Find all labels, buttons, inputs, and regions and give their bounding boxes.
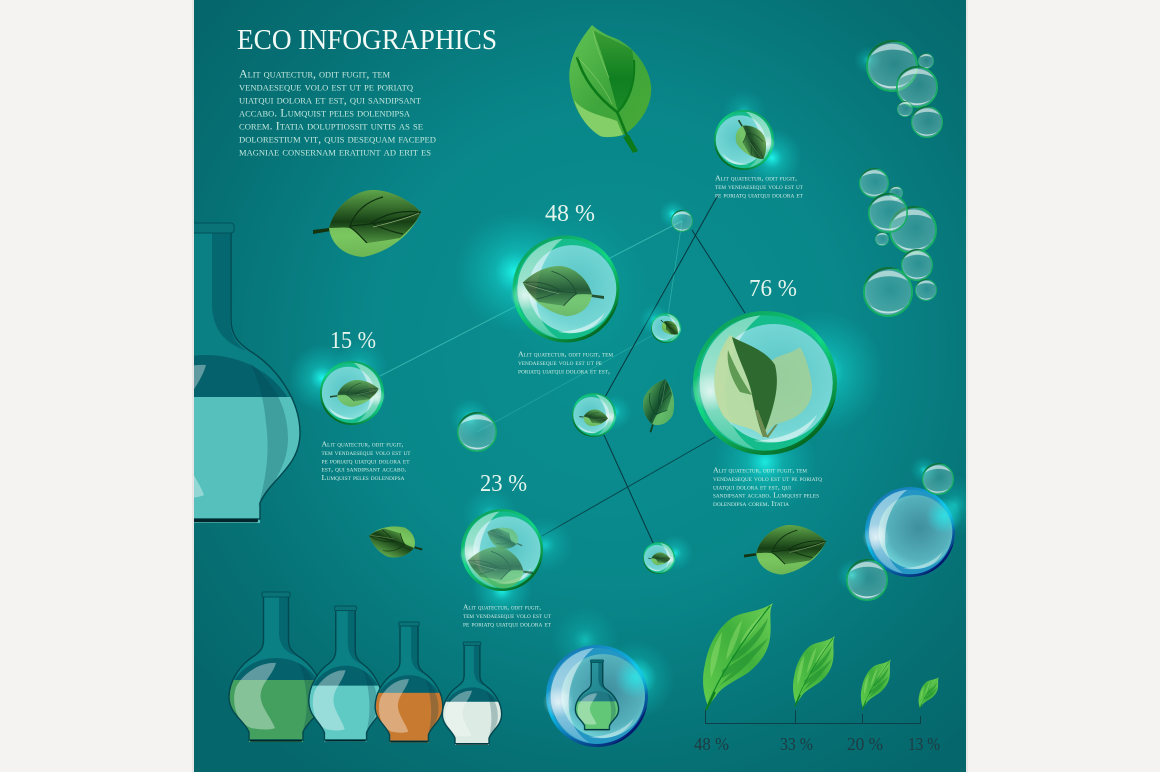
bubble cluster top right: [854, 40, 942, 137]
caption top: [715, 176, 803, 198]
icon: large green leaf: [569, 25, 651, 153]
sprout 33: [793, 636, 835, 707]
intro paragraph: magniae consernam eratiunt ad erit es: [239, 146, 431, 158]
large flask at left edge: [194, 222, 301, 523]
icon: faded leaf centre: [643, 379, 674, 432]
axis label 20: 20 %: [847, 734, 883, 754]
axis label 48: 48 %: [694, 734, 729, 754]
big blue bubble: [863, 483, 966, 577]
icon: dark leaf lower left: [369, 526, 423, 558]
node bubble with leaf: [642, 306, 682, 343]
caption 15 percent: Alit quatectur, odit fugit,: [322, 440, 404, 448]
bubble top with leaf: [714, 97, 797, 182]
title: ECO INFOGRAPHICS: [237, 25, 497, 56]
caption 23 percent: tem vendaeseque volo est ut: [463, 611, 551, 620]
node bubble clear left: [454, 402, 497, 452]
caption top: pe poriatq uiatqui dolora et: [715, 190, 803, 200]
leaf: large in bubble 23: [468, 547, 533, 589]
sprout leaf chart: [694, 603, 940, 754]
caption 15 percent: est, qui sandipsant accabo.: [322, 464, 407, 474]
caption 23 percent: Alit quatectur, odit fugit,: [463, 602, 541, 612]
caption 15 percent: pe poriatq uiatqui dolora et: [322, 456, 410, 466]
label 76 percent: 76 %: [749, 276, 797, 302]
small flask orange: [373, 622, 445, 743]
green flask inside bubble: [574, 660, 620, 730]
small flask teal: [306, 606, 384, 742]
leaf: small in bubble 23: [488, 528, 522, 549]
sprout 48: [703, 603, 773, 710]
connector lines: [380, 195, 745, 545]
intro paragraph: dolorestium vit, quis desequam faceped: [239, 134, 436, 146]
intro paragraph: corem. Itatia doluptiossit untis as se: [239, 120, 423, 132]
teal poster panel: [194, 0, 966, 772]
small flask white: [440, 642, 504, 745]
sprout 13: [919, 677, 939, 709]
intro paragraph: accabo. Lumquist peles dolendipsa: [239, 108, 410, 120]
node bubble lower with leaf: [643, 539, 689, 574]
intro paragraph: [239, 68, 436, 158]
caption 76 percent: vendaeseque volo est ut pe poriatq: [713, 474, 822, 483]
sprout 20: [861, 660, 891, 710]
caption 23 percent: [463, 604, 551, 628]
bubble 15 percent: [294, 347, 385, 425]
label 48 percent: 48 %: [545, 201, 595, 227]
leaf: dark left in bubble 76: [714, 335, 777, 437]
caption 15 percent: Lumquist peles dolendipsa: [322, 473, 405, 482]
intro paragraph: Alit quatectur, odit fugit, tem: [239, 68, 390, 80]
axis: [706, 710, 920, 724]
caption 76 percent: Alit quatectur, odit fugit, tem: [713, 466, 808, 474]
caption top: Alit quatectur, odit fugit,: [715, 174, 797, 182]
caption 15 percent: tem vendaeseque volo est ut: [322, 448, 410, 457]
small flask green: [228, 592, 317, 742]
caption 48 percent: poriatq uiatqui dolora et est,: [518, 366, 610, 376]
leaf: pale right in bubble 76: [763, 347, 812, 437]
intro paragraph: uiatqui dolora et est, qui sandipsant: [239, 94, 421, 106]
label 15 percent: 15 %: [330, 328, 376, 354]
blue-side bubble upper: [913, 459, 954, 495]
caption 48 percent: Alit quatectur, odit fugit, tem: [518, 350, 614, 358]
caption 76 percent: dolendipsa corem. Itatia: [713, 499, 789, 508]
blue-side bubble lower: [836, 559, 887, 600]
axis label 13: 13 %: [908, 734, 940, 754]
bubble 76 percent: [691, 311, 874, 504]
icon: dark leaf lower right: [744, 525, 826, 575]
node bubble small clear: [662, 202, 693, 232]
bubble 23 percent: [460, 495, 565, 615]
caption 76 percent: sandipsant accabo. Lumquist peles: [713, 490, 819, 500]
bubble 48 percent: [466, 221, 620, 342]
label 23 percent: 23 %: [480, 471, 527, 497]
intro paragraph: vendaeseque volo est ut pe poriatq: [239, 82, 413, 94]
icon: dark leaf upper left: [313, 190, 421, 257]
bubble cluster middle right: [860, 168, 937, 316]
node bubble centre with leaf: [572, 393, 632, 437]
caption 48 percent: vendaeseque volo est ut pe: [518, 358, 602, 367]
axis label 33: 33 %: [780, 734, 813, 754]
caption 48 percent: [518, 352, 613, 374]
caption top: tem vendaeseque volo est ut: [715, 182, 803, 191]
caption 23 percent: pe poriatq uiatqui dolora et: [463, 620, 551, 628]
caption 15 percent: [322, 440, 410, 482]
caption 76 percent: [713, 466, 822, 508]
flask bubble: [544, 617, 668, 747]
caption 76 percent: uiatqui dolora et est, qui: [713, 482, 791, 492]
